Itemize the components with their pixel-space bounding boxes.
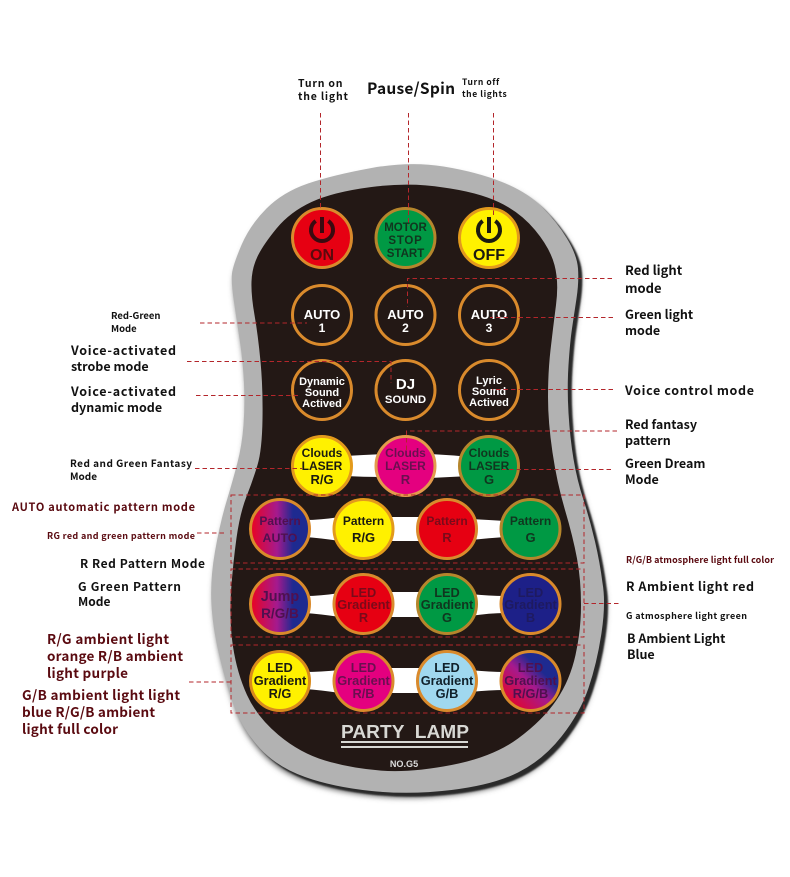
button: clouds laser R/G: LASER <box>302 459 343 473</box>
label: red-green mode: Red-Green <box>111 308 160 322</box>
label: R/G and R/B ambient light: orange R/B ambient <box>47 645 183 665</box>
button: clouds laser G <box>460 436 518 496</box>
button: AUTO 2 <box>376 286 435 344</box>
label: voice-activated dynamic mode: Voice-activated <box>70 381 176 400</box>
button: LED gradient G: Gradient <box>421 597 474 612</box>
button: AUTO 2: AUTO <box>387 307 424 322</box>
button: LED gradient R/B: LED <box>351 660 376 675</box>
button: LED gradient G/B: Gradient <box>421 673 474 688</box>
button: LED gradient R: R <box>359 610 368 625</box>
button: pattern AUTO: Pattern <box>259 514 301 528</box>
button: LED gradient R <box>334 574 393 634</box>
button: LED gradient R/G/B: LED <box>518 660 543 675</box>
label: voice-activated strobe mode <box>70 340 176 375</box>
button: OFF <box>460 208 518 268</box>
label: voice-activated strobe mode: strobe mode <box>71 356 149 375</box>
label: turn off the lights: the lights <box>462 88 507 100</box>
label: R/G and R/B ambient light <box>47 628 183 682</box>
brand: party lamp: PARTY LAMP <box>341 721 469 742</box>
label: voice-activated strobe mode: Voice-activated <box>70 340 176 359</box>
button: AUTO 3 <box>460 286 518 344</box>
label: pause/spin: Pause/Spin <box>367 77 455 99</box>
button: pattern AUTO <box>250 500 310 558</box>
button: clouds laser R/G: R/G <box>310 472 334 487</box>
model number: NO.G5 <box>390 759 418 769</box>
button: LED gradient R/G: LED <box>267 660 293 675</box>
label: red fantasy pattern: Red fantasy <box>625 414 697 433</box>
button: clouds laser G: Clouds <box>469 446 510 460</box>
label: red fantasy pattern <box>625 414 697 449</box>
label: turn on the light <box>298 76 349 104</box>
button: lyric sound actived <box>460 360 518 420</box>
label: green dream mode <box>625 453 705 488</box>
label: red light mode: mode <box>625 278 662 297</box>
button: motor stop start: STOP <box>388 235 423 247</box>
button: LED gradient B: Gradient <box>504 597 558 612</box>
button: dynamic sound actived: Sound <box>305 387 339 399</box>
label: red and green fantasy mode: Red and Green Fantasy <box>70 455 192 470</box>
button: AUTO 3: AUTO <box>471 307 507 322</box>
button: LED gradient R/B <box>334 652 393 710</box>
dashed leader lines <box>187 113 620 713</box>
button: pattern R/G: Pattern <box>343 514 384 528</box>
button: LED gradient R/G <box>250 652 310 710</box>
button: pattern G <box>501 500 560 558</box>
button: LED gradient R/G: R/G <box>269 686 291 701</box>
button: AUTO 1 <box>292 286 352 344</box>
label: AUTO automatic pattern mode: AUTO automatic pattern mode <box>11 499 195 515</box>
button: LED gradient R/G/B: Gradient <box>504 673 558 688</box>
button: clouds laser G: G <box>484 472 494 487</box>
button: LED gradient R/B: R/B <box>352 686 375 701</box>
label: turn off the lights: Turn off <box>462 76 500 88</box>
button: pattern R/G: R/G <box>352 530 375 545</box>
white connector bands between buttons <box>305 454 505 693</box>
label: RG red and green pattern mode: RG red and green pattern mode <box>47 529 195 542</box>
label: red-green mode: Mode <box>111 321 137 335</box>
label: voice control mode: Voice control mode <box>624 380 754 399</box>
button: clouds laser R: R <box>401 472 411 487</box>
label: turn on the light: the light <box>298 89 349 104</box>
button: pattern G: Pattern <box>510 514 551 528</box>
button: lyric sound actived: Sound <box>472 386 506 398</box>
button: motor stop start: MOTOR <box>384 222 427 234</box>
label: G/B and R/G/B ambient light: light full color <box>22 718 118 738</box>
button: pattern AUTO: AUTO <box>263 531 298 545</box>
button: pattern R <box>418 500 476 558</box>
label: green dream mode: Green Dream <box>625 453 705 472</box>
label: turn off the lights <box>462 76 507 100</box>
button: AUTO 1: AUTO <box>304 307 340 322</box>
label: G/B and R/G/B ambient light <box>22 684 180 738</box>
button: LED gradient B <box>501 574 560 634</box>
button: pattern R/G <box>334 500 393 558</box>
button: clouds laser R: Clouds <box>385 446 426 460</box>
button: LED gradient R: Gradient <box>337 597 391 612</box>
label: voice-activated dynamic mode: dynamic mode <box>71 397 162 416</box>
button: motor stop start: START <box>387 248 424 260</box>
label: red light mode: Red light <box>625 260 683 279</box>
button: clouds laser R <box>376 436 435 496</box>
button: clouds laser G: LASER <box>469 459 510 473</box>
button: LED gradient G/B: LED <box>434 660 460 675</box>
button: LED gradient B: LED <box>518 585 543 600</box>
label: green light mode: mode <box>625 320 660 339</box>
label: green dream mode: Mode <box>625 469 659 488</box>
label: G atmosphere light green: G atmosphere light green <box>626 609 747 622</box>
button: LED gradient G <box>418 574 476 634</box>
button: OFF: OFF <box>473 247 505 264</box>
button: pattern G: G <box>525 530 536 545</box>
label: G green pattern mode: Mode <box>78 593 110 610</box>
label: B ambient light blue: Blue <box>627 644 655 663</box>
label: red light mode <box>625 260 683 297</box>
button: clouds laser R/G: Clouds <box>302 446 343 460</box>
button: DJ sound: DJ <box>396 376 415 393</box>
button: LED gradient R/G: Gradient <box>254 673 307 688</box>
label: R ambient light red: R Ambient light red <box>626 576 754 595</box>
button: LED gradient B: B <box>526 610 535 625</box>
remote control body <box>211 164 608 798</box>
label: red-green mode <box>111 308 160 335</box>
button: LED gradient G: LED <box>434 585 460 600</box>
button: AUTO 2: 2 <box>402 321 409 335</box>
label: B ambient light blue: B Ambient Light <box>627 628 726 647</box>
button: dynamic sound actived: Actived <box>302 398 342 410</box>
label: G green pattern mode: G Green Pattern <box>78 578 181 595</box>
button: LED gradient R/G/B <box>501 652 560 710</box>
button: jump R/G/B: Jump <box>261 589 299 605</box>
label: red fantasy pattern: pattern <box>625 430 671 449</box>
button: pattern R: R <box>442 530 452 545</box>
button: dynamic sound actived: Dynamic <box>299 376 345 388</box>
button: LED gradient R: LED <box>351 585 376 600</box>
button: lyric sound actived: Lyric <box>476 375 502 387</box>
button: clouds laser R/G <box>292 436 352 496</box>
button: lyric sound actived: Actived <box>469 397 509 409</box>
label: R/G and R/B ambient light: light purple <box>47 662 128 682</box>
label: voice-activated dynamic mode <box>70 381 176 416</box>
button: motor stop start <box>376 208 435 268</box>
label: G/B and R/G/B ambient light: blue R/G/B ambient <box>22 701 155 721</box>
button: ON: ON <box>310 247 334 264</box>
label: turn on the light: Turn on <box>298 76 343 91</box>
label: green light mode <box>625 304 694 339</box>
label: B ambient light blue <box>627 628 726 663</box>
button: ON <box>292 208 352 268</box>
label: R/G and R/B ambient light: R/G ambient light <box>47 628 169 648</box>
button: LED gradient G/B <box>418 652 476 710</box>
button: LED gradient R/B: Gradient <box>337 673 391 688</box>
button: dynamic sound actived <box>292 360 352 420</box>
button: jump R/G/B: R/G/B <box>261 606 299 621</box>
button: DJ sound: SOUND <box>385 394 426 406</box>
label: R/G/B atmosphere light full color: R/G/B atmosphere light full color <box>626 553 774 566</box>
button: jump R/G/B <box>250 574 310 634</box>
label: G green pattern mode <box>78 578 181 610</box>
label: R red pattern mode: R Red Pattern Mode <box>80 555 205 572</box>
button: LED gradient R/G/B: R/G/B <box>513 686 548 701</box>
button: pattern R: Pattern <box>426 514 468 528</box>
button: LED gradient G: G <box>442 610 452 625</box>
button: LED gradient G/B: G/B <box>436 686 458 701</box>
label: red and green fantasy mode <box>70 455 192 483</box>
label: green light mode: Green light <box>625 304 694 323</box>
label: red and green fantasy mode: Mode <box>70 468 97 483</box>
button: DJ sound <box>376 360 435 420</box>
label: G/B and R/G/B ambient light: G/B ambient light light <box>22 684 180 704</box>
button: AUTO 1: 1 <box>319 321 326 335</box>
button: AUTO 3: 3 <box>486 321 493 335</box>
button: clouds laser R: LASER <box>385 459 426 473</box>
